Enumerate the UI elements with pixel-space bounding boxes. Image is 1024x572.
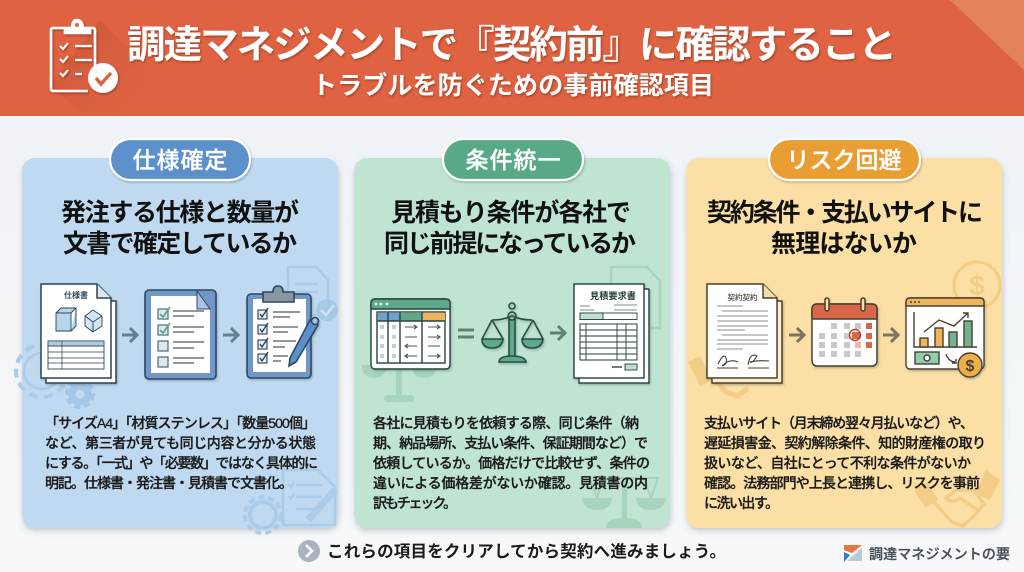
badge — [769, 139, 920, 180]
icon: clipboard and pen — [247, 286, 318, 378]
icon: finance dashboard with coin: $ — [966, 358, 975, 375]
watermark icons — [688, 262, 1000, 526]
body text: など、第三者が見ても同じ内容と分かる状態 — [45, 435, 316, 451]
body text: 「サイズA4」「材質ステンレス」「数量500個」 — [45, 415, 316, 431]
icon: clipboard with check — [51, 20, 118, 93]
heading — [707, 199, 983, 258]
body text: 扱いなど、自社にとって不利な条件がないか — [704, 455, 971, 471]
body text: に洗い出す。 — [704, 495, 779, 511]
body text — [373, 415, 650, 511]
icon: balance scale — [482, 303, 543, 362]
watermark icons — [16, 267, 338, 533]
body text: 違いによる価格差がないか確認。見積書の内 — [373, 475, 648, 491]
watermark icons: $ — [969, 270, 985, 301]
icon: quotation request form: 見積要求書 — [590, 290, 636, 301]
badge — [443, 139, 583, 180]
badge: 条件統一 — [466, 147, 560, 173]
body text: 明記。仕様書・発注書・見積書で文書化。 — [45, 475, 293, 491]
heading: 同じ前提になっているか — [384, 230, 636, 258]
icon: specification sheet — [41, 284, 116, 383]
body text: 依頼しているか。価格だけで比較せず、条件の — [373, 455, 650, 471]
body text — [45, 415, 318, 491]
icon: checklist document — [145, 290, 216, 379]
footer message: これらの項目をクリアしてから契約へ進みましょう。 — [327, 542, 726, 561]
subtitle: トラブルを防ぐための事前確認項目 — [312, 71, 714, 100]
heading — [61, 198, 299, 258]
body text: 各社に見積もりを依頼する際、同じ条件（納 — [373, 415, 639, 431]
icon: comparison table window — [371, 299, 450, 369]
body text: 期、納品場所、支払い条件、保証期間など）で — [373, 435, 648, 451]
body text: にする。「一式」や「必要数」ではなく具体的に — [45, 455, 318, 471]
panel: リスク回避 — [686, 139, 1002, 528]
heading: 契約条件・支払いサイトに — [707, 199, 983, 227]
heading — [384, 198, 636, 258]
body text: 確認。法務部門や上長と連携し、リスクを事前 — [704, 475, 980, 491]
icon: specification sheet: 仕様書 — [64, 290, 88, 300]
body text: 訳もチェック。 — [373, 495, 457, 511]
badge: 仕様確定 — [132, 147, 228, 173]
panel: 条件統一 — [354, 139, 670, 528]
arrow — [883, 328, 898, 342]
brand logo: 調達マネジメントの要 — [869, 546, 1010, 562]
icon: calendar — [812, 298, 877, 366]
arrow — [550, 326, 565, 340]
watermark icons — [362, 267, 666, 528]
icon: equals sign — [458, 330, 474, 337]
body text — [704, 415, 986, 511]
header banner — [0, 0, 1024, 116]
icon: chevron circle — [298, 540, 320, 562]
icon: signed contract — [707, 284, 782, 383]
heading: 文書で確定しているか — [63, 230, 297, 258]
panel: 仕様確定 — [16, 139, 338, 533]
icon: signed contract: 契約契約 — [728, 292, 758, 302]
heading: 発注する仕様と数量が — [61, 198, 299, 227]
badge: リスク回避 — [786, 147, 902, 173]
arrow — [789, 328, 804, 342]
body text: 遅延損害金、契約解除条件、知的財産権の取り — [704, 435, 986, 451]
title: 調達マネジメントで『契約前』に確認すること — [127, 24, 897, 67]
icon: quotation request form — [574, 284, 649, 383]
icon: finance dashboard with coin — [906, 298, 984, 377]
arrow — [223, 328, 238, 342]
arrow — [122, 328, 137, 342]
heading: 見積もり条件が各社で — [391, 198, 631, 227]
heading: 無理はないか — [771, 230, 917, 258]
body text: 支払いサイト（月末締め翌々月払いなど）や、 — [704, 415, 974, 431]
badge — [110, 139, 250, 180]
